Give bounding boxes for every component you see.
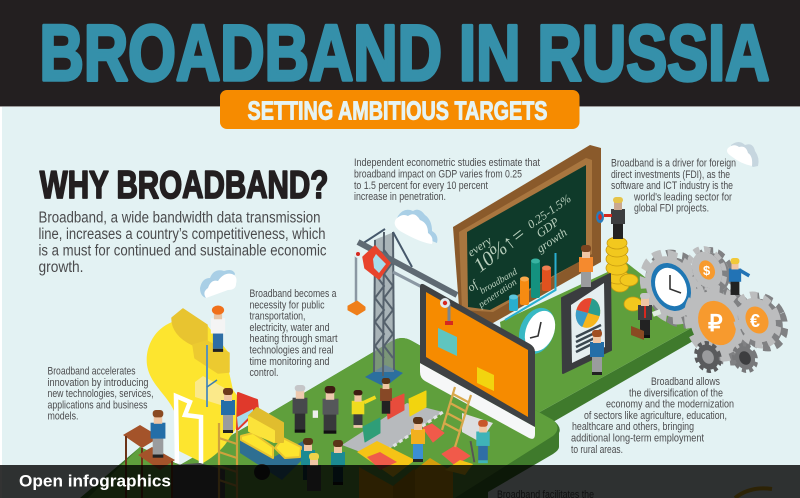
- intro paragraph: line, increases a country’s competitiveness, which: [38, 226, 326, 243]
- person: at tablet: [590, 330, 604, 375]
- text: public necessity: heating through smart: [250, 333, 338, 345]
- ladder: bulb: [219, 423, 237, 498]
- intro paragraph: growth.: [38, 259, 84, 276]
- person: orange shirt at board: [579, 245, 593, 287]
- text: econometric studies: Independent econometric studies estimate that: [354, 157, 540, 169]
- text: public necessity: necessity for public: [250, 299, 325, 311]
- intro paragraph: [38, 210, 327, 276]
- crane: [348, 229, 457, 387]
- footer bar: [0, 465, 800, 498]
- left hook with orange weight: [348, 250, 365, 315]
- text: innovation: [48, 366, 154, 423]
- text: public necessity: transportation,: [250, 311, 306, 323]
- light bulb: [147, 309, 243, 498]
- text: econometric studies: to 1.5 percent for every 10 percent: [354, 180, 488, 192]
- text: public necessity: control.: [250, 367, 279, 379]
- text: foreign direct investment: world's leading sector for: [633, 191, 732, 203]
- chalkboard: [453, 145, 601, 323]
- text: foreign direct investment: Broadband is a driver for foreign: [611, 158, 736, 170]
- person: blonde seated: [307, 453, 321, 491]
- chalk writing: penetration: [476, 278, 519, 311]
- illustration: isometric scene: [80, 142, 793, 498]
- person: old man with briefcase: [631, 293, 661, 340]
- gear: dollar: [683, 243, 739, 300]
- person: at table: [151, 410, 165, 458]
- bulb blocks: [172, 309, 229, 407]
- text: econometric studies: broadband impact on GDP varies from 0.25: [354, 168, 522, 180]
- text: econometric studies: increase in penetration.: [354, 191, 446, 203]
- text: public necessity: technologies and real: [250, 344, 334, 356]
- pie chart: [573, 295, 603, 331]
- chalk writing: growth: [534, 225, 570, 255]
- person: teal suit right: [331, 440, 345, 485]
- text: public necessity: electricity, water and: [250, 322, 330, 334]
- text: diversification: [571, 376, 734, 456]
- text: diversification: of sectors like agriculture, education,: [584, 410, 727, 422]
- text: diversification: to rural areas.: [571, 444, 623, 456]
- icon: wall clock: [512, 302, 562, 360]
- text: diversification: economy and the modernization: [606, 399, 734, 411]
- ladder: tan: [442, 387, 471, 447]
- text: diversification: additional long-term employment: [571, 432, 704, 444]
- person: blonde with megaphone: [596, 197, 625, 239]
- subtitle pill: SETTING AMBITIOUS TARGETS: [248, 98, 548, 126]
- hook with teal block: [438, 298, 457, 356]
- gear: ruble: [676, 279, 767, 372]
- tablet: [562, 274, 611, 373]
- person: teal suit left: [301, 438, 315, 480]
- text: innovation: new technologies, services,: [48, 388, 154, 400]
- person: on conveyor in yellow: [411, 417, 425, 462]
- person: grey haired with cup: [293, 385, 318, 433]
- gear: ruble: ₽: [708, 310, 723, 336]
- text: foreign direct investment: software and ICT industry is the: [611, 180, 733, 192]
- truck: [237, 393, 305, 480]
- platform: main green ground: [80, 263, 702, 498]
- text: innovation: Broadband accelerates: [48, 366, 136, 378]
- people: [151, 197, 750, 491]
- conveyor belt: [342, 391, 470, 465]
- yellow block: [477, 367, 494, 391]
- intro paragraph: is a must for continued and sustainable economic: [38, 242, 327, 260]
- person: brown jacket: [380, 378, 392, 414]
- heading: why broadband: WHY BROADBAND?: [40, 164, 328, 207]
- chalk writing: 0.25-1.5%: [525, 191, 574, 231]
- text: diversification: healthcare and others, bringing: [572, 421, 694, 433]
- chalk writing: of: [464, 277, 482, 294]
- gear: clock: [632, 244, 719, 334]
- chalk writing: every: [465, 233, 495, 259]
- text: innovation: models.: [48, 411, 78, 423]
- text: econometric studies: [354, 157, 540, 203]
- text: diversification: Broadband allows: [651, 376, 720, 388]
- icon: cut off gold arc: [735, 488, 772, 498]
- boxes: [357, 441, 473, 498]
- gear: euro: [728, 288, 793, 355]
- text: public necessity: Broadband becomes a: [250, 288, 336, 300]
- chalk writing: [464, 191, 574, 311]
- intro paragraph: Broadband, a wide bandwidth data transmission: [38, 210, 320, 226]
- monitor: [420, 284, 535, 442]
- text: foreign direct investment: direct investments (FDI), as the: [611, 169, 730, 181]
- footer label: Open infographics: [19, 472, 171, 490]
- crane cab: [363, 246, 390, 279]
- text: foreign direct investment: global FDI projects.: [634, 202, 709, 214]
- chalk writing: GDP: [534, 214, 562, 240]
- chalk writing: 10%↑=: [470, 223, 530, 277]
- person: teal shirt with camera: [471, 420, 490, 463]
- person: blonde on gears: [729, 258, 750, 295]
- cloud: near crane: [395, 210, 437, 244]
- text: public necessity: time monitoring and: [250, 356, 330, 368]
- text: foreign direct investment: [611, 158, 736, 214]
- person: dark suit: [323, 386, 338, 434]
- text: innovation: applications and business: [48, 399, 148, 411]
- text: public necessity: [250, 288, 338, 379]
- gear: euro: €: [750, 311, 760, 331]
- subtitle pill: [220, 90, 580, 129]
- person: hard hat worker: [211, 305, 225, 352]
- gear: dollar: $: [703, 263, 711, 278]
- bulb base: [173, 463, 225, 498]
- header band: [0, 0, 800, 107]
- icon: coin stack: [606, 237, 642, 311]
- table: [123, 425, 175, 498]
- cloud: above bulb: [200, 270, 236, 298]
- truck cargo: [241, 408, 301, 458]
- person: on bulb ladder: [221, 388, 235, 433]
- cloud: top right: [727, 142, 759, 167]
- text: diversification: the diversification of the: [629, 387, 723, 399]
- chalk writing: broadband: [478, 267, 520, 297]
- text: innovation: innovation by introducing: [48, 377, 148, 389]
- gears: small dark pair: [691, 339, 760, 375]
- person: woman in yellow: [352, 390, 376, 428]
- bar chart: [505, 253, 556, 320]
